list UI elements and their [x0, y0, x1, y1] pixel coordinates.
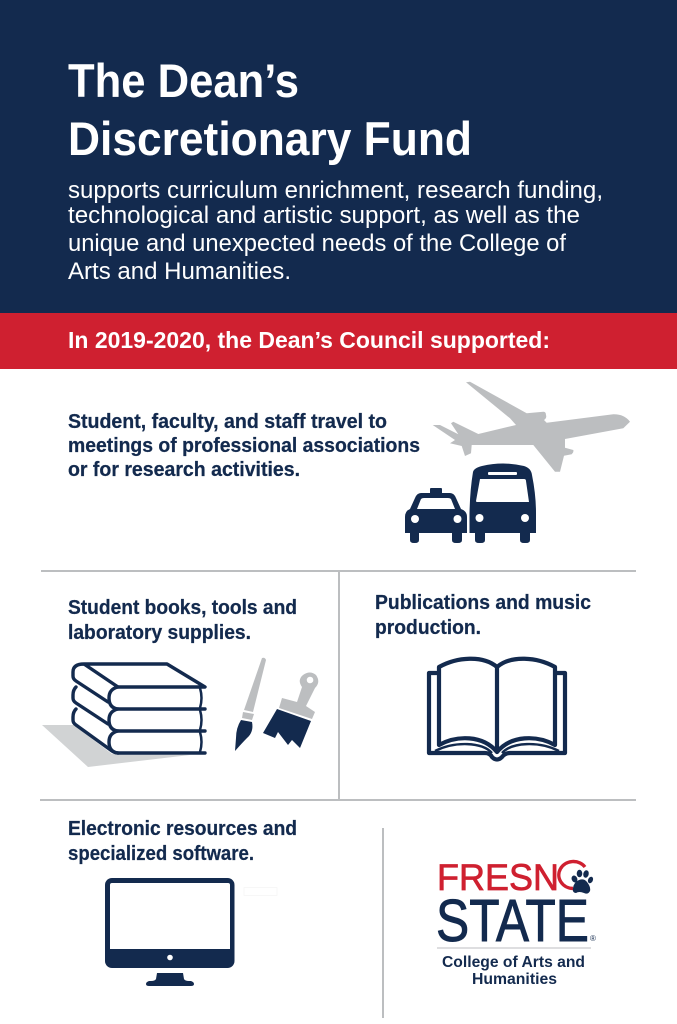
logo: Fresno State: FRESN [437, 857, 559, 898]
icon: paintbrush [235, 658, 266, 751]
title: The Dean’s [68, 54, 299, 107]
logo: Fresno State: STATE [436, 888, 589, 954]
travel text: Student, faculty, and staff travel to [68, 411, 387, 433]
books text [68, 597, 297, 644]
electronic resources text [68, 818, 297, 865]
electronic resources text: specialized software. [68, 843, 254, 865]
banner: In 2019-2020, the Dean’s Council supported: [68, 327, 550, 353]
title: Discretionary Fund [68, 112, 472, 165]
intro text: technological and artistic support, as well as the [68, 202, 580, 229]
travel text [68, 411, 420, 481]
icon: open book [429, 659, 565, 760]
logo: O arc [559, 862, 585, 888]
logo: Fresno State: Humanities [472, 971, 557, 988]
publications text: Publications and music [375, 592, 591, 614]
intro text: unique and unexpected needs of the College of [68, 230, 566, 257]
logo: Fresno State: College of Arts and [442, 954, 585, 971]
intro text: Arts and Humanities. [68, 258, 291, 285]
bus windshield and lights [476, 472, 529, 522]
title [68, 54, 472, 165]
icon: book shadow [42, 725, 190, 767]
icon: stack of books [73, 664, 205, 753]
divider lines [40, 571, 636, 1018]
icon: flat brush [263, 672, 318, 748]
icon: taxi [405, 488, 467, 543]
travel text: or for research activities. [68, 459, 300, 481]
publications text: production. [375, 617, 481, 639]
logo: paw [570, 870, 594, 894]
taxi window and lights [411, 498, 462, 523]
icon: airplane [433, 382, 630, 472]
travel text: meetings of professional associations [68, 435, 420, 457]
books text: Student books, tools and [68, 597, 297, 619]
panel: header [0, 0, 677, 313]
faint box [244, 888, 277, 896]
publications text [375, 592, 591, 639]
banner [0, 313, 677, 369]
logo: Fresno State: ® [590, 934, 596, 943]
icon: bus [470, 464, 536, 543]
intro text [68, 177, 603, 285]
intro text: supports curriculum enrichment, research funding, [68, 177, 603, 204]
electronic resources text: Electronic resources and [68, 818, 297, 840]
logo: Fresno State [436, 857, 596, 988]
icon: computer monitor [105, 878, 234, 986]
books text: laboratory supplies. [68, 622, 251, 644]
